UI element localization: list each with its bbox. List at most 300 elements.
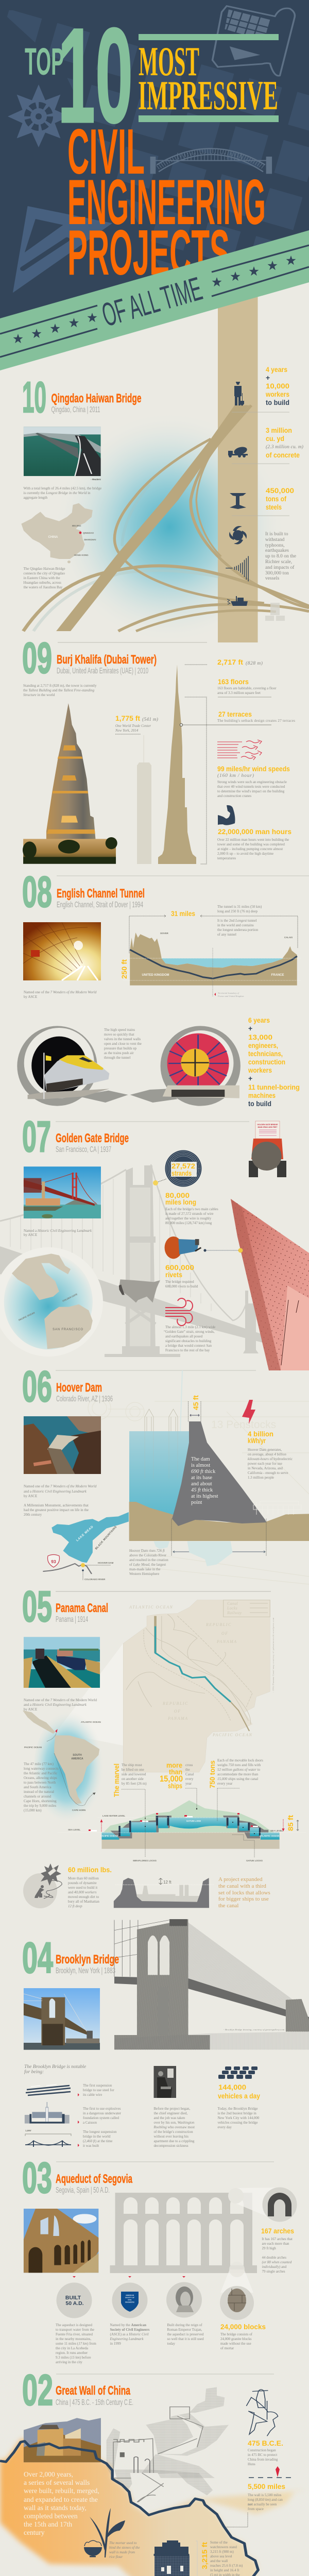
stat: ships: 15,000	[160, 1774, 183, 1784]
text: roebling: Roebling who oversaw most	[153, 2125, 195, 2129]
icon: map pin and scale	[249, 2466, 291, 2478]
chart: channel cross-section: France and United Kingdom	[217, 995, 244, 997]
stat: wind	[217, 765, 290, 798]
text: waterway: channels or around	[24, 1794, 52, 1799]
text: length: is currently the Longest Bridge in the World in	[24, 491, 91, 495]
stat: terraces	[180, 710, 295, 726]
chart: lock cross-section: GATUN LOCKS	[246, 1859, 263, 1862]
icon: span bridge: 1,595'	[25, 2129, 31, 2132]
text: water transport: region. It runs another	[56, 2351, 88, 2355]
stat: dynamite: were used to build it	[68, 1886, 97, 1890]
text: longest: it was built	[83, 2144, 99, 2148]
heading: Panama Canal	[56, 1601, 108, 1615]
text: strait: Francisco to the rest of the bay	[165, 1348, 210, 1352]
stat: ships: more	[166, 1761, 182, 1769]
photo: tunnel boring machine	[130, 1026, 241, 1106]
photo: great wall	[24, 2418, 101, 2462]
stat: years and workers	[265, 365, 289, 406]
map: americas route: ATLANTIC OCEAN	[81, 1721, 101, 1723]
numeral: 07	[22, 1112, 51, 1161]
text: waterway: The 47 mile (77 km)	[24, 1762, 54, 1766]
text: waterway: Cape Horn, shortening	[24, 1799, 57, 1803]
markers	[73, 2276, 185, 2278]
text: lake mead: Western Hemisphere	[129, 1572, 159, 1576]
heading: Qingdao Haiwan Bridge	[52, 392, 141, 405]
text: withstand: 300,000 ton	[265, 570, 289, 576]
stat: builders: workers	[248, 1066, 272, 1074]
stat: wire length	[165, 1191, 218, 1225]
map: lake mead: HOOVER DAM	[98, 1562, 114, 1564]
text: connects: connects the city of Qingdao	[24, 571, 65, 575]
icon: built 50 ad	[57, 2282, 92, 2318]
text: asce: (ASCE) as a Historic Civil	[110, 2332, 149, 2336]
stat: electricity	[248, 1430, 293, 1480]
stat: floors	[217, 677, 277, 697]
stat: dynamite: moved enough dirt to	[68, 1895, 99, 1899]
stat: rivets: rivets	[165, 1270, 182, 1279]
text: lake mead: and resulted in the creation	[129, 1558, 168, 1562]
numeral: 06	[22, 1362, 52, 1411]
chart: lock cross-section: GATUN LAKE	[186, 1820, 201, 1822]
icon: granite block	[220, 2262, 254, 2320]
text: busiest: vehicles crossing the bridge	[217, 2121, 258, 2125]
text: landmark: Named a Historic Civil Engineering Landmark	[24, 1229, 92, 1233]
numeral: 04	[22, 1934, 53, 1982]
stat: wire length: is made of 27,572 strands of wire	[165, 1212, 214, 1216]
stat: rivets: 600,000	[165, 1263, 194, 1272]
map: americas route: PACIFIC OCEAN	[24, 1746, 42, 1749]
text: ship lifted: be lifted on one	[122, 1768, 144, 1772]
photo: washington roebling	[153, 2066, 176, 2098]
stat: wind: 99 miles/hr wind speeds	[217, 765, 290, 773]
title: big 10: 10	[58, 0, 133, 151]
faint penstocks note: 13 Penstocks	[211, 1419, 276, 1431]
panel: header	[0, 0, 309, 325]
chart: lock cross-section	[58, 1788, 306, 1862]
text: named wonder: by ASCE	[24, 995, 37, 999]
map: americas route: SOUTH	[73, 1754, 82, 1757]
stat: dynamite: pounds of dynamite	[68, 1881, 97, 1885]
numeral: 08	[22, 868, 52, 916]
map: china: CHINA	[48, 536, 58, 539]
stat: rivets	[165, 1263, 198, 1289]
text: ship lifted: side and lowered	[122, 1772, 146, 1776]
text: waterway: and South America	[24, 1785, 52, 1789]
stat: builders: 13,000	[248, 1033, 272, 1041]
map: golden gate strait: PACIFIC OCEAN	[18, 1311, 35, 1321]
stat: builders: machines	[248, 1091, 276, 1099]
icon: built 50 ad: 50 A.D.	[65, 2300, 84, 2307]
text: train valves: pressure that builds up	[104, 1046, 137, 1050]
height dotted guides	[185, 665, 207, 864]
stat: steel: tons of	[266, 495, 286, 503]
photo: bridge	[24, 427, 101, 476]
text: train valves: through the tunnel	[104, 1056, 130, 1060]
text: trajan: today	[167, 2342, 176, 2346]
map: china: HONG KONG	[74, 554, 89, 556]
photo: brooklyn bridge	[24, 1988, 100, 2050]
stat: years and workers: to build	[266, 398, 289, 406]
heading: Golden Gate Bridge	[56, 1131, 129, 1145]
icon: caisson	[25, 2102, 70, 2124]
chart: channel cross-section: DOVER	[160, 932, 169, 935]
text: roebling: decompression sickness	[153, 2144, 188, 2148]
stat: 475 bce: in 475 BC to protect	[248, 2453, 277, 2457]
stat: electricity: kilowatt-hours of hydroelectric	[248, 1457, 293, 1461]
stat: arches: 29 ft high	[262, 2246, 276, 2250]
text: tunnel length: The tunnel is 31 miles (50 km)	[217, 905, 262, 909]
stat: 85 ft: 85 ft	[286, 1815, 295, 1831]
text: strait: and earthquakes all posed	[165, 1334, 203, 1338]
stat: floors: 163 floors	[218, 677, 249, 686]
stat: wind: (160 km / hour)	[217, 773, 254, 778]
text: connects: the waters of Jiaozhou Bay	[24, 585, 63, 589]
map: old panama canal map: OF	[221, 1631, 229, 1636]
text: of all time: OF ALL TIME	[98, 270, 206, 333]
numeral: 10	[22, 373, 46, 421]
stat: arches: 167 arches	[261, 2227, 294, 2235]
map: old panama canal map: - 1914 Panama Canal map courtesy of pabuninoworld.wordpress.com	[272, 1618, 274, 1692]
stat: arches: 79 single arches	[262, 2269, 285, 2274]
text: over 2000 years: the 15th and 17th	[24, 2520, 72, 2528]
text: lock doors: weighs 750 tons and fills with	[217, 1763, 261, 1767]
text: withstand: earthquakes	[265, 548, 289, 553]
stat: height: (828 m)	[246, 660, 263, 666]
text: waterway: instead of the natural	[24, 1790, 54, 1794]
decorative bars	[139, 34, 279, 122]
text: watchtowers: and the wall	[210, 2559, 228, 2563]
text: over 2000 years: wall as it stands today,	[24, 2504, 87, 2512]
marker	[78, 2144, 79, 2147]
text: expansion: A project expanded	[218, 1876, 263, 1883]
panel: 06 Hoover Dam	[22, 1362, 309, 1584]
text: explosives: The first to use explosives	[83, 2107, 121, 2111]
note: 12 ft: 12 ft	[163, 1880, 171, 1885]
text: length: With a total length of 26.4 miles (42.5 km), the bridge	[24, 486, 101, 490]
stat: rivets: 600,000 rivets to build	[165, 1284, 198, 1289]
stat: 45 ft: 45 ft	[192, 1395, 200, 1410]
stat: wire length: miles long	[165, 1198, 196, 1206]
map: china: BEIJING	[72, 524, 81, 527]
text: watchtowers: above sea level	[210, 2554, 232, 2558]
stat: concrete	[266, 426, 303, 459]
stat: steel	[266, 486, 294, 511]
stat: wind: Strong winds were such an engineering obstacle	[217, 780, 287, 784]
stat: builders: technicians,	[248, 1049, 283, 1058]
stat: electricity: 4 billion	[248, 1430, 273, 1438]
text: lake mead: man-made lake in the	[129, 1567, 160, 1571]
rivet pointer	[203, 1248, 243, 1253]
banner: of all time	[0, 230, 309, 370]
chart: road interchange	[23, 405, 309, 631]
icon: built 50 ad: BUILT	[65, 2295, 81, 2301]
stat: builders	[248, 1016, 300, 1108]
photo: cable section: MAIN SPAN 4200 FEET	[258, 1126, 278, 1128]
bay water	[54, 407, 285, 643]
stat: the marvel: The marvel	[112, 1764, 121, 1797]
stat: steel: steels	[266, 503, 282, 511]
text: train valves: move so quickly that	[104, 1032, 134, 1037]
chart: channel cross-section	[124, 915, 301, 997]
text: busiest: every day	[217, 2125, 232, 2129]
text: first steel: bridge to use steel for	[83, 2088, 114, 2092]
text: over 2000 years: were built, rebuilt, merged,	[24, 2487, 99, 2495]
stat: 5500 miles	[227, 2482, 285, 2527]
illustration: brooklyn bridge engraving	[114, 1919, 309, 2049]
icon: gear star	[8, 84, 70, 147]
map: china: SHANGHAI	[84, 538, 96, 541]
icon: flexed arm	[218, 805, 235, 825]
stat: builders: 6 years	[248, 1016, 270, 1024]
map: old panama canal map: Canal	[227, 1601, 238, 1606]
stat: builders: +	[248, 1074, 252, 1082]
stat: vehicles: vehicles a day	[218, 2092, 260, 2100]
stat: one world trade center	[115, 714, 158, 734]
text: withstand: and impacts of	[265, 565, 295, 570]
stat: 5500 miles: not actually be seen	[248, 2502, 277, 2506]
text: mortar: bind the stones of the	[109, 2546, 140, 2550]
stat: blocks: made without the use	[220, 2342, 251, 2346]
stat: 5500 miles: long (8,850 km) and can	[248, 2498, 283, 2502]
map: americas route: AMERICA	[71, 1757, 83, 1760]
panel: 03 Aqueduct of Segovia	[22, 2154, 297, 2364]
text: longest: bridge in the world	[83, 2134, 111, 2139]
icon: typhoon	[229, 526, 247, 544]
stat: 5500 miles: 5,500 miles	[248, 2482, 285, 2490]
map: old panama canal map: PANAMA	[216, 1639, 237, 1644]
stat: years and workers: workers	[265, 390, 289, 398]
icon: asce shield: SOCIETY OF	[125, 2297, 134, 2299]
map: old panama canal map: PACIFIC OCEAN	[212, 1733, 252, 1737]
stat: height	[217, 658, 263, 666]
panel: 09 Burj Khalifa	[22, 634, 295, 864]
text: watchtowers: reaches 25.6 ft (7.8 m)	[210, 2564, 243, 2568]
stat: ships	[160, 1761, 183, 1790]
stat: one world trade center: One World Trade Center	[115, 724, 151, 728]
stat: blocks: 24,000 blocks	[220, 2323, 266, 2331]
map: lake mead: BLACK MOUNTAINS	[95, 1526, 117, 1550]
icon: trajan bust	[166, 2282, 202, 2317]
stat: 5500 miles: The wall is 5,500 miles	[248, 2493, 282, 2497]
text: train valves: The high speed trains	[104, 1028, 135, 1032]
text: busiest: New York City with 144,000	[217, 2116, 260, 2120]
stat: concrete: of concrete	[266, 451, 300, 459]
text: millennium: had the greatest positive impact on life in the	[24, 1508, 89, 1512]
map: lake mead	[43, 1512, 233, 1581]
text: busiest: Today, the Brooklyn Bridge	[217, 2107, 258, 2111]
text: withstand: typhoons,	[265, 543, 285, 548]
map: old panama canal map	[123, 1600, 274, 1772]
stat: arches: are each more than	[262, 2242, 289, 2246]
text: train valves: valves in the tunnel walls	[104, 1037, 141, 1041]
text: waterway: Oceans, allowing ships	[24, 1776, 57, 1780]
illustration: great wall drawing	[107, 2387, 229, 2478]
stat: 690 ft: 690 ft	[209, 1546, 230, 1554]
text: notable: The Brooklyn Bridge is notable	[24, 2064, 87, 2070]
text: wonder: and a Historic Civil Engineering Landmark	[24, 1489, 87, 1494]
chart: lock cross-section: SEA LEVEL	[68, 1828, 81, 1831]
stat: height: 2,717 ft	[217, 658, 243, 666]
subheading: Segovia, Spain | 50 A.D.	[56, 2186, 110, 2195]
text: wonder: by ASCE	[24, 1494, 37, 1498]
text: ship lifted: The ship must	[122, 1763, 142, 1767]
stat: ships: than	[169, 1768, 182, 1776]
stat: concrete: (2.3 million cu. m)	[266, 444, 303, 450]
icon: rice bowl and plant	[84, 2508, 125, 2557]
numeral: 09	[22, 634, 52, 682]
text: ship lifted: by 85 feet (26 m)	[122, 1782, 147, 1786]
title: most: MOST	[139, 39, 199, 84]
map: lake mead: LAKE MEAD	[76, 1525, 94, 1542]
stat: 475 bce: China from invading	[248, 2458, 278, 2462]
text: wonder: Named one of the 7 Wonders of the Modern World	[24, 1484, 96, 1488]
panel: header: CIVIL	[67, 116, 145, 188]
text: millennium: 20th century	[24, 1513, 42, 1517]
chart: dam cross-section	[129, 1401, 309, 1556]
map line: great wall route	[0, 2441, 258, 2576]
map: golden gate strait	[0, 1247, 103, 1357]
stat: blocks: of mortar	[220, 2346, 234, 2350]
chart: lock cross-section: PACIFIC OCEAN	[100, 1835, 118, 1837]
text: lake mead: above the Colorado River	[129, 1553, 167, 1557]
text: expansion: the canal with a third	[218, 1883, 266, 1889]
stat: terraces: The building's setback design creates 27 terraces	[217, 719, 295, 723]
icon: traffic	[218, 2066, 258, 2079]
stat: 475 bce	[248, 2439, 283, 2466]
stat: electricity: California - enough to serve	[248, 1471, 288, 1475]
stat: builders: +	[248, 1024, 252, 1032]
chart: dam cross-section: The dam	[191, 1456, 210, 1462]
stat: dynamite: bury all of Manhattan	[68, 1900, 99, 1904]
text: withstand: It is built to	[265, 531, 288, 537]
stat: wire length: 80,000 miles (128,747 km) long	[165, 1221, 212, 1225]
text: water transport: some 11 miles (17 km) from	[56, 2342, 96, 2346]
stat: ships: ships	[168, 1782, 182, 1790]
caption: - Brooklyn Bridge drawing, courtesy of geezergallery.com	[224, 2028, 284, 2031]
text: water transport: arriving in the city	[56, 2360, 82, 2364]
text: over 2000 years: century	[24, 2529, 45, 2536]
text: waterway: (15,000 km)	[24, 1808, 42, 1812]
icon: span bridge	[25, 2129, 71, 2147]
text: watchtowers: in height and 16.4 ft	[210, 2568, 239, 2572]
stat: one world trade center: New York, 2014	[115, 728, 139, 733]
text: panama wonder: by ASCE	[24, 1707, 37, 1711]
stat: vehicles	[218, 2083, 260, 2100]
chart: channel cross-section: UNITED KINGDOM	[142, 974, 169, 977]
stat: blocks: 24,000 granite blocks	[220, 2337, 252, 2341]
text: train valves: open and close to vent the	[104, 1042, 142, 1046]
text: notable: for being:	[24, 2069, 44, 2075]
subheading: English Channel, Strait of Dover | 1994	[57, 901, 143, 909]
stat: dynamite: and 40,000 workers	[68, 1890, 96, 1894]
text: busiest: is the 2nd busiest bridge in	[217, 2111, 256, 2115]
heading: Brooklyn Bridge	[56, 1953, 119, 1967]
faint blueprint backdrop	[88, 1397, 309, 1584]
map: lake mead: 93	[51, 1559, 56, 1564]
photo: burj khalifa	[23, 703, 117, 864]
map: china: QINGDAO	[83, 532, 94, 534]
text: roebling: over by his son, Washington	[153, 2121, 194, 2125]
subheading: San Francisco, CA | 1937	[56, 1145, 111, 1154]
photo: hoover dam	[24, 1416, 101, 1474]
text: lake mead: of Lake Mead, the largest	[129, 1563, 166, 1567]
text: ship lifted: on another side	[122, 1777, 144, 1781]
stat: electricity: in Nevada, Arizona, and	[248, 1466, 283, 1470]
subheading: Panama | 1914	[56, 1615, 88, 1624]
icon: set square	[13, 206, 112, 293]
stat: man hours: at night – including pumping concrete almost	[217, 847, 283, 851]
numeral: 02	[22, 2366, 53, 2414]
chart: manhattan buried	[114, 1878, 214, 1908]
heading: Aqueduct of Segovia	[56, 2172, 132, 2186]
stat: one world trade center: (541 m)	[142, 717, 158, 722]
text: trajan: so well that it is still used	[167, 2337, 204, 2341]
stat: 31 miles: 31 miles	[171, 909, 195, 918]
stat: arches: 44 double arches	[262, 2256, 286, 2260]
icon: watchtower	[153, 2540, 192, 2576]
text: lake mead: Hoover Dam rises 726 ft	[129, 1549, 165, 1553]
detail beam: arch	[228, 2188, 297, 2222]
stat: man hours: Over 22 million man hours went into building the	[217, 838, 289, 842]
icon: asce shield: AMERICAN	[126, 2294, 134, 2296]
caption: - Reuters	[91, 478, 101, 481]
text: roebling: of the bridge's construction	[153, 2130, 193, 2134]
peach land wash	[0, 2438, 309, 2576]
stat: floors: area of 3.3 million square feet	[217, 691, 261, 695]
stat: dynamite: 60 million lbs.	[68, 1866, 112, 1874]
photo: cable section: GOLDEN GATE BRIDGE	[258, 1124, 278, 1126]
text: roebling: Before the project began,	[153, 2107, 190, 2111]
text: second longest: of any tunnel	[217, 933, 236, 937]
text: strait: significant obstacles to building	[165, 1339, 212, 1343]
text: millennium: A Millennium Monument, achievements that	[24, 1503, 89, 1507]
text: intro: Standing at 2,717 ft (828 m), the tower is currently	[23, 684, 97, 688]
text: first steel: its cable wire	[83, 2093, 102, 2097]
marker	[78, 2093, 79, 2096]
text: asce: Society of Civil Engineers	[110, 2328, 150, 2332]
text: strait: “Golden Gate” strait, strong winds,	[164, 1330, 215, 1334]
text: cross: cross	[185, 1763, 193, 1767]
chart: aqueduct silhouette	[110, 2193, 257, 2273]
icon: horseman	[246, 2389, 278, 2436]
text: connects: The Qingdao Haiwan Bridge	[24, 567, 65, 571]
stat: arches: individually) and	[262, 2265, 286, 2269]
stat: wire length: and together the wire is roughly	[165, 1216, 212, 1221]
bridge cables	[0, 1164, 246, 1320]
icon: ship	[227, 596, 248, 606]
title: top: TOP	[25, 40, 64, 83]
text: watchtowers: Some of the	[210, 2540, 228, 2545]
stat: man hours: tower and some of the building was completed	[217, 842, 285, 846]
map: old panama canal map: ATLANTIC OCEAN	[129, 1605, 173, 1609]
stat: electricity: kWh/yr	[248, 1436, 266, 1445]
text: cross: Canal	[185, 1772, 194, 1776]
text: intro: the Tallest Building and the Tallest Free-standing	[23, 688, 94, 692]
stat: electricity: power each year for use	[248, 1462, 282, 1466]
map: americas route: CAPE HORN	[72, 1809, 85, 1811]
icon: asce shield	[112, 2282, 147, 2318]
stat: dynamite: More than 60 million	[68, 1876, 99, 1880]
icon: seismograph	[226, 556, 248, 581]
icon: asce shield: ENGINEERS	[125, 2301, 134, 2303]
photo: aqueduct	[24, 2209, 98, 2273]
illustration: bridge silhouette	[0, 1165, 263, 1357]
chart: cable strands	[153, 1150, 202, 1187]
text: mortar: rice flour	[109, 2555, 123, 2559]
text: roebling: without ever leaving his	[153, 2134, 188, 2139]
text: watchtowers: 3,215 ft (980 m)	[210, 2550, 234, 2554]
text: roebling: and the job was taken	[153, 2116, 185, 2120]
